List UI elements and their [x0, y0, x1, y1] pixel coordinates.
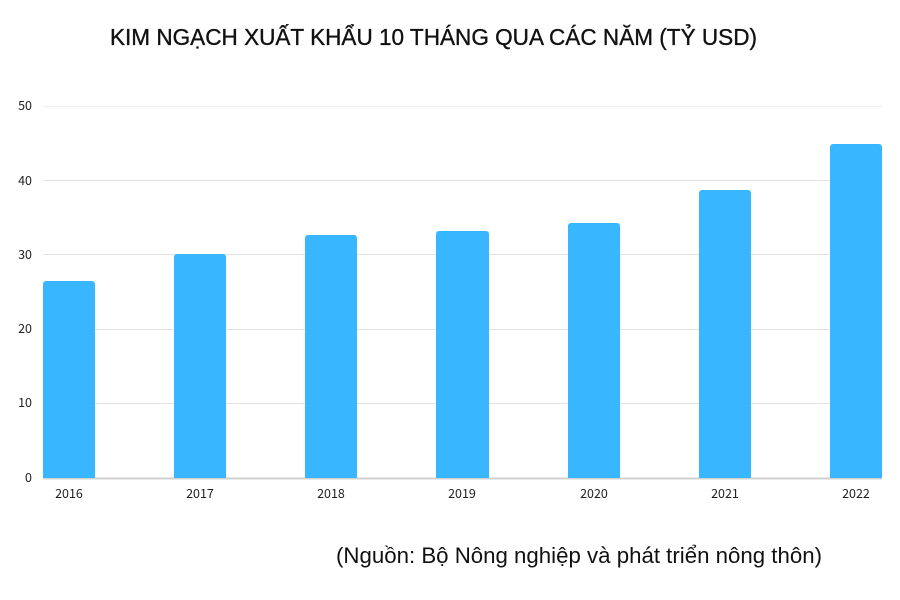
- source note: (Nguồn: Bộ Nông nghiệp và phát triển nông thôn): [336, 543, 822, 568]
- x axis labels: [55, 483, 870, 502]
- y axis labels: 20: [18, 318, 32, 337]
- y axis labels: 30: [18, 244, 32, 263]
- y axis labels: [18, 95, 32, 486]
- bar chart: [18, 95, 882, 502]
- y axis labels: 0: [25, 467, 32, 486]
- y axis labels: 40: [18, 170, 32, 189]
- title: KIM NGẠCH XUẤT KHẨU 10 THÁNG QUA CÁC NĂM (TỶ USD): [110, 22, 757, 50]
- y axis labels: 50: [18, 95, 32, 114]
- x axis labels: 2016: [55, 483, 83, 502]
- x axis labels: 2017: [186, 483, 214, 502]
- x axis labels: 2021: [711, 483, 739, 502]
- y axis labels: 10: [18, 392, 32, 411]
- x axis labels: 2022: [842, 483, 870, 502]
- bars: [43, 144, 882, 478]
- x axis labels: 2018: [317, 483, 345, 502]
- x axis labels: 2020: [580, 483, 608, 502]
- x axis labels: 2019: [448, 483, 476, 502]
